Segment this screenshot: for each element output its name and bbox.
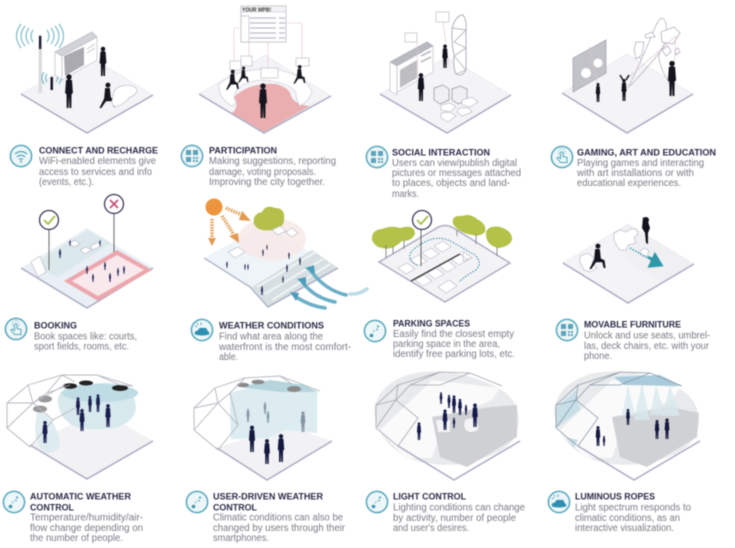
benches [219, 69, 312, 106]
description [393, 329, 515, 360]
illustration: parking [372, 210, 512, 302]
floor shadow [432, 405, 517, 467]
climate zones [58, 383, 136, 429]
furniture cluster [614, 229, 638, 250]
icon: route steps [364, 320, 386, 342]
description: by activity, number of people [393, 513, 517, 524]
description [30, 512, 143, 544]
heading: GAMING, ART AND EDUCATION [577, 148, 716, 158]
hexagon seats [434, 85, 478, 122]
tables [69, 240, 101, 254]
billboard [55, 32, 97, 80]
description: pictures or messages attached [392, 168, 521, 179]
panel: automatic weather control [3, 375, 153, 544]
illustration: automatic weather dome [7, 375, 153, 479]
illustration: luminous ropes dome [554, 372, 700, 480]
check marker [412, 210, 432, 266]
dome wireframe [556, 372, 682, 446]
single seat [640, 248, 649, 256]
platform [562, 54, 693, 133]
platform [380, 57, 511, 133]
people [246, 402, 305, 464]
wish board: YOUR WPB! [242, 8, 272, 14]
check marker [40, 210, 58, 270]
blue wall panels [556, 390, 580, 448]
icon: cloud and sun [191, 319, 213, 341]
description [393, 502, 526, 534]
description: Improving the city together. [209, 177, 325, 188]
dome wireframe [194, 376, 320, 450]
description: damage, voting proposals. [209, 167, 316, 178]
platform [563, 224, 694, 303]
description: Playing games and interacting [577, 158, 704, 169]
heading: WEATHER CONDITIONS [219, 320, 324, 332]
description: flow change depending on [30, 523, 143, 534]
waterfront platform [204, 225, 338, 307]
heading [213, 492, 323, 514]
wind arrows [296, 271, 367, 308]
description: WiFi-enabled elements give [39, 156, 157, 167]
illustration: user-driven dome [194, 376, 332, 480]
description: Book spaces like: courts, [34, 332, 137, 342]
description [34, 332, 137, 352]
people [226, 65, 305, 118]
description: Unlock and use seats, umbrel- [584, 330, 710, 342]
pink field [64, 250, 152, 301]
icon: qr code [181, 145, 203, 167]
road divider [411, 254, 460, 281]
sun [206, 198, 222, 216]
dotted movement arrow [630, 248, 661, 266]
description: Users can view/publish digital [392, 158, 517, 169]
icon: route steps [186, 491, 208, 513]
dotted route [410, 238, 479, 282]
heading: MOVABLE FURNITURE [584, 320, 681, 330]
heading: CONTROL [30, 502, 74, 514]
people [596, 61, 676, 102]
seats [112, 85, 137, 107]
description [584, 330, 710, 362]
heading [30, 492, 131, 514]
heading: AUTOMATIC WEATHER [30, 492, 131, 502]
people [226, 245, 301, 295]
tree trunks [386, 230, 497, 258]
illustration: weather [204, 198, 367, 308]
dome wireframe [376, 372, 502, 446]
icon: touch hand [551, 146, 573, 168]
illustration: movable furniture [563, 217, 694, 303]
light dome volume [374, 372, 519, 465]
climate volume [230, 382, 317, 439]
twisted tower [452, 15, 466, 75]
trees [372, 215, 512, 249]
panel: parking spaces [364, 210, 515, 360]
description: waterfront is the most comfort- [218, 342, 351, 353]
illustration: connect and recharge [16, 24, 153, 133]
warm glow [238, 218, 306, 260]
platform edge [398, 441, 520, 480]
floor shadow [612, 407, 699, 467]
heading: LIGHT CONTROL [393, 492, 466, 502]
interaction lines [589, 36, 676, 86]
heading: PARKING SPACES [393, 318, 470, 330]
illustration: light control dome [374, 372, 520, 480]
description: the number of people. [30, 533, 123, 544]
platform [217, 425, 332, 480]
people [42, 394, 111, 443]
heading: USER-DRIVEN WEATHER [213, 492, 323, 502]
description [209, 156, 336, 188]
icon: wifi [10, 145, 32, 167]
description: Easily find the closest empty [393, 329, 514, 340]
illustration: gaming [562, 18, 693, 133]
panel: connect and recharge [10, 24, 158, 188]
description: Find what area along the [219, 332, 324, 342]
description: able. [219, 352, 238, 363]
platform [21, 55, 153, 133]
game wall [573, 40, 606, 92]
ceiling discs [237, 380, 301, 392]
speech bubbles [230, 56, 309, 78]
description [213, 512, 346, 544]
panel: weather conditions [191, 198, 367, 363]
description: parking space in the area, [393, 339, 500, 350]
cross marker [104, 194, 124, 252]
description: Making suggestions, reporting [209, 156, 336, 167]
people [65, 47, 116, 108]
art sculpture [628, 18, 680, 88]
description: (events, etc.). [39, 177, 94, 188]
people [59, 240, 125, 282]
heading: CONTROL [213, 502, 257, 514]
illustration: social interaction [380, 12, 511, 133]
description: Light spectrum responds to [575, 502, 692, 514]
icon: route steps [366, 491, 388, 513]
description: access to services and info [39, 167, 153, 178]
wind arrow heads [290, 265, 315, 301]
description: and user's desires. [393, 523, 469, 534]
platform [199, 55, 331, 133]
seats with person [580, 253, 597, 272]
platform [21, 228, 153, 308]
description: interactive visualization. [575, 523, 674, 534]
panel: light control [366, 372, 526, 534]
connector lines [234, 23, 302, 68]
description: smartphones. [213, 533, 269, 544]
panel: social interaction [366, 12, 521, 200]
description: phone. [584, 351, 612, 362]
heading: BOOKING [34, 320, 77, 332]
description: marks. [392, 189, 419, 200]
pale court [32, 230, 111, 277]
sun rays [208, 208, 251, 246]
description: changed by users through their [213, 523, 346, 534]
description: educational experiences. [577, 178, 681, 189]
heading: LUMINOUS ROPES [575, 492, 655, 502]
bench [31, 256, 46, 277]
people [589, 217, 650, 269]
people [418, 45, 448, 101]
light shafts [622, 383, 680, 420]
pink floor [232, 84, 310, 132]
heading: SOCIAL INTERACTION [392, 148, 490, 158]
description: identify free parking lots, etc. [393, 349, 515, 360]
people [417, 392, 478, 440]
dome wireframe [7, 375, 133, 447]
heading: PARTICIPATION [209, 146, 277, 156]
description [576, 158, 704, 189]
description: Temperature/humidity/air- [30, 512, 143, 524]
illustration: participation [199, 6, 331, 133]
description: sport fields, rooms, etc. [34, 342, 129, 352]
heading: CONNECT AND RECHARGE [39, 146, 158, 156]
icon: qr code [556, 319, 578, 341]
description: Lighting conditions can change [393, 502, 526, 514]
description: to places, objects and land- [392, 178, 510, 189]
icon: cloud and sun [548, 491, 570, 513]
panel: luminous ropes [548, 372, 700, 534]
shelters [228, 226, 298, 258]
billboard [390, 42, 433, 95]
description [39, 156, 157, 188]
panel: booking [5, 194, 153, 352]
people [596, 409, 669, 446]
icon: touch hand [5, 318, 27, 340]
platform [30, 410, 153, 479]
shore stripes [257, 252, 330, 300]
panel: movable furniture [556, 217, 710, 362]
panel: gaming, art and education [551, 18, 716, 189]
description: climatic conditions, as an [575, 513, 680, 524]
ceiling discs [33, 380, 128, 412]
icon: wifi antenna [16, 24, 64, 93]
dome volume [554, 372, 699, 465]
panel: user-driven weather control [186, 376, 346, 544]
rounded platform [379, 226, 510, 302]
description: with art installations or with [576, 168, 694, 179]
description: Climatic conditions can also be [213, 512, 344, 524]
tree [254, 207, 284, 230]
parked cars [398, 241, 472, 293]
description [575, 502, 692, 534]
icon: route steps [3, 491, 25, 513]
blue ceiling panel [614, 375, 682, 386]
platform edge [578, 441, 700, 480]
description [392, 158, 521, 200]
illustration: booking [21, 194, 153, 308]
panel: participation [181, 6, 336, 188]
speech bubbles and lines [405, 12, 449, 78]
description: las, deck chairs, etc. with your [584, 341, 710, 352]
icon: qr code [366, 146, 388, 168]
description [218, 332, 351, 363]
